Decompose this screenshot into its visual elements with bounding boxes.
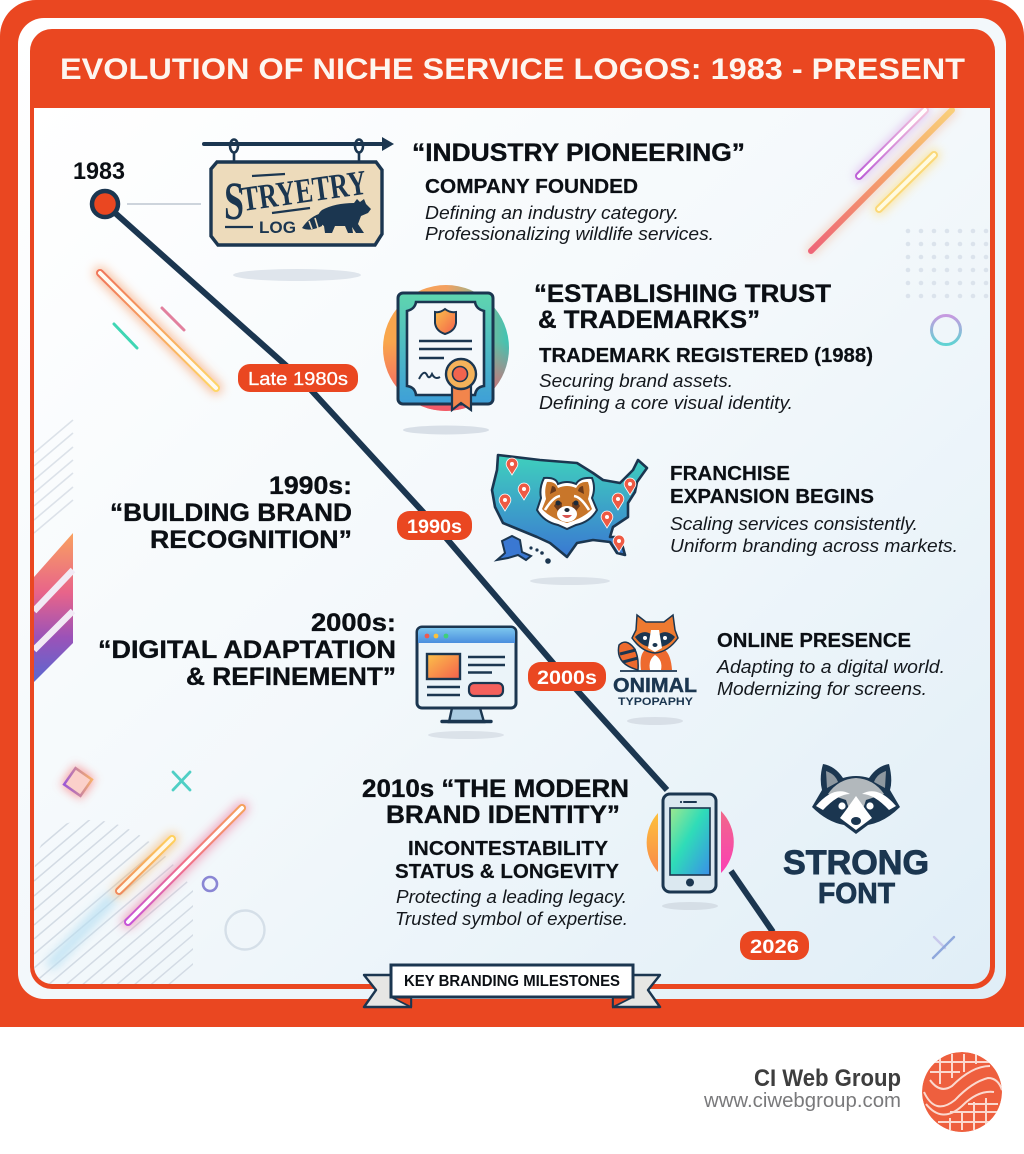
text block: industry pioneering: “INDUSTRY PIONEERING”: [412, 139, 745, 167]
text block: 2010s modern brand identity: Trusted symbol of expertise.: [395, 909, 628, 929]
ring top right: [932, 316, 960, 344]
text block: establishing trust: [534, 280, 873, 413]
blue glow: [53, 900, 110, 963]
text block: online presence: Adapting to a digital world.: [716, 657, 945, 677]
text block: 1990s brand recognition: RECOGNITION”: [150, 526, 352, 554]
text block: industry pioneering: COMPANY FOUNDED: [425, 176, 638, 198]
text block: establishing trust: Defining a core visual identity.: [539, 393, 793, 413]
content panel background: [34, 108, 990, 984]
text block: 2000s digital adaptation: “DIGITAL ADAPTATION: [98, 636, 396, 664]
teal cross: [173, 772, 190, 790]
text block: establishing trust: Securing brand assets.: [539, 371, 733, 391]
neon lines top right: [811, 110, 952, 251]
icon: smartphone: [647, 794, 734, 892]
start marker 1983: [73, 158, 201, 217]
neon lines left: [100, 273, 216, 388]
pill: 2026: [740, 931, 809, 960]
icon: hanging sign logo: LOG: [259, 218, 296, 237]
text block: 2000s digital adaptation: & REFINEMENT”: [186, 663, 396, 691]
small rings: [203, 877, 264, 950]
text block: online presence: [716, 630, 945, 699]
text block: franchise expansion: FRANCHISE: [670, 463, 790, 485]
shadow: map: [530, 577, 610, 585]
logo text: strong font: FONT: [818, 878, 895, 910]
icon: US map with raccoon: [492, 455, 647, 564]
text block: franchise expansion: EXPANSION BEGINS: [670, 486, 874, 508]
text block: 1990s brand recognition: 1990s:: [269, 472, 352, 500]
text block: 1990s brand recognition: [110, 472, 352, 554]
footer brand text: www.ciwebgroup.com: [703, 1090, 901, 1112]
timeline line: [105, 204, 773, 932]
ribbon: key branding milestones: [364, 965, 660, 1007]
footer brand text: [703, 1065, 901, 1112]
shadow: monitor: [428, 731, 504, 739]
pill: 2000s: 2000s: [537, 668, 597, 689]
text block: 2010s modern brand identity: Protecting a leading legacy.: [396, 887, 627, 907]
dot grid: [906, 229, 988, 298]
ribbon: key branding milestones: KEY BRANDING MILESTONES: [404, 973, 620, 990]
icon: onimal typography logo: [613, 615, 697, 708]
icon: certificate: [383, 285, 509, 411]
logo text: strong font: [783, 844, 929, 910]
text block: 1990s brand recognition: “BUILDING BRAND: [110, 499, 352, 527]
small cross bottom right: [933, 937, 954, 958]
text block: 2010s modern brand identity: 2010s “THE MODERN: [362, 775, 629, 803]
icon: hanging sign logo: S: [224, 171, 244, 231]
title: EVOLUTION OF NICHE SERVICE LOGOS: 1983 - PRESENT: [60, 53, 965, 86]
text block: 2010s modern brand identity: [362, 775, 629, 929]
neon lines bottom left: [119, 808, 242, 922]
icon: hanging sign logo: [204, 137, 394, 245]
pill: 2026: 2026: [750, 937, 799, 958]
text block: 2000s digital adaptation: 2000s:: [311, 609, 396, 637]
diamond: [61, 765, 95, 799]
raccoon badge on map: [537, 478, 597, 529]
text block: franchise expansion: Uniform branding across markets.: [670, 536, 958, 556]
logo text: strong font: STRONG: [783, 844, 929, 882]
footer brand text: CI Web Group: [754, 1065, 901, 1092]
hatch left: [34, 420, 73, 533]
pill: 2000s: [528, 662, 606, 691]
stripes left: [34, 533, 73, 682]
shadow: certificate: [403, 426, 489, 434]
icon: onimal typography logo: TYPOPAPHY: [618, 696, 694, 708]
hatch circle: [34, 820, 193, 984]
icon: onimal typography logo: ONIMAL: [613, 675, 697, 697]
shadow: phone: [662, 902, 718, 910]
text block: establishing trust: & TRADEMARKS”: [538, 306, 760, 334]
text block: industry pioneering: Professionalizing wildlife services.: [425, 224, 714, 244]
icon: raccoon head logo: [812, 764, 900, 834]
text block: franchise expansion: [670, 463, 958, 556]
text block: 2000s digital adaptation: [98, 609, 396, 691]
icon: computer monitor: [417, 627, 516, 722]
start marker 1983: 1983: [73, 158, 125, 185]
pill: 1990s: [397, 511, 472, 540]
shadow: onimal logo: [627, 717, 683, 725]
text block: establishing trust: TRADEMARK REGISTERED (1988): [539, 345, 873, 367]
orange header panel and border: [30, 29, 995, 989]
text block: industry pioneering: Defining an industry category.: [425, 203, 679, 223]
text block: establishing trust: “ESTABLISHING TRUST: [534, 280, 831, 308]
text block: online presence: Modernizing for screens.: [717, 679, 927, 699]
text block: online presence: ONLINE PRESENCE: [717, 630, 911, 652]
text block: industry pioneering: [412, 139, 745, 244]
text block: 2010s modern brand identity: BRAND IDENTITY”: [386, 801, 620, 829]
pill: Late 1980s: Late 1980s: [248, 369, 348, 389]
icon: footer logo: [922, 1052, 1002, 1132]
text block: franchise expansion: Scaling services consistently.: [670, 514, 918, 534]
text block: 2010s modern brand identity: INCONTESTABILITY: [408, 838, 609, 860]
text block: 2010s modern brand identity: STATUS & LONGEVITY: [395, 861, 620, 883]
pill: 1990s: 1990s: [407, 517, 462, 538]
shadow: sign: [233, 269, 361, 281]
icon: hanging sign logo: TRYETRY: [239, 163, 369, 219]
pill: Late 1980s: [238, 364, 358, 392]
